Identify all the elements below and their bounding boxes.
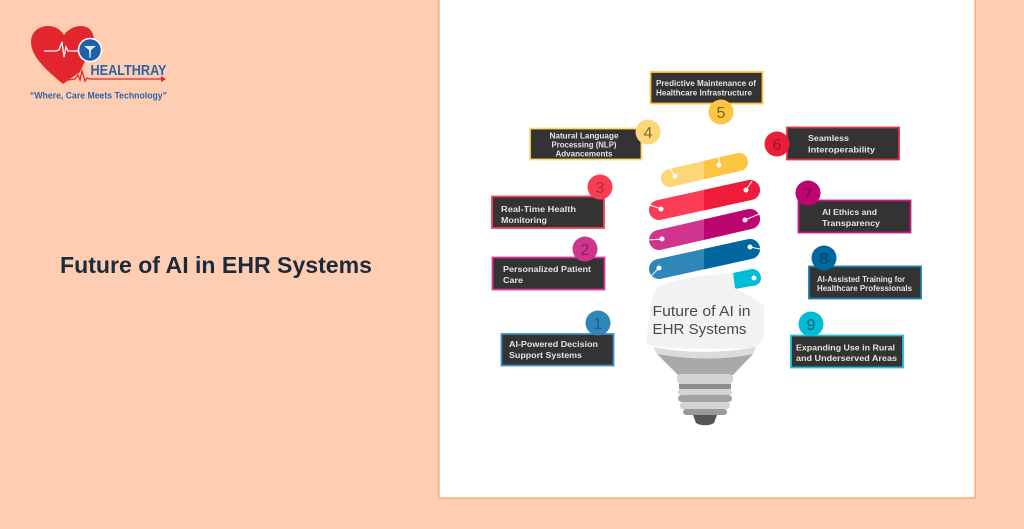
item 2 [492, 236, 604, 290]
coil: blue [651, 244, 760, 276]
item 1: AI-Powered Decision [509, 339, 598, 349]
screw threads [677, 374, 733, 415]
bulb label: EHR Systems [652, 322, 746, 338]
item 7: 7 [804, 186, 813, 203]
item 4: 4 [644, 125, 653, 142]
item 4: Processing (NLP) [552, 140, 617, 150]
item 8: AI-Assisted Training for [817, 275, 905, 284]
item 8 [809, 246, 921, 298]
bulb tip [693, 415, 717, 425]
item 6: 6 [773, 137, 782, 154]
bulb glass [646, 273, 764, 349]
item 5: Predictive Maintenance of [656, 78, 756, 88]
item 8: 8 [820, 251, 829, 268]
item 7: Transparency [822, 218, 880, 228]
item 3 [492, 174, 612, 228]
item 9: and Underserved Areas [796, 353, 897, 363]
panel: infographic card [439, 0, 975, 498]
title: Future of AI in EHR Systems [60, 252, 372, 278]
bulb label: Future of AI in [652, 304, 750, 320]
logo tagline: “Where, Care Meets Technology” [30, 90, 167, 100]
item 4 [530, 120, 660, 160]
item 5: 5 [717, 105, 726, 122]
item 6: Interoperability [808, 144, 875, 154]
item 9 [791, 312, 903, 368]
item 1: Support Systems [509, 350, 582, 360]
logo arrow [68, 71, 162, 81]
item 2: 2 [581, 242, 590, 259]
icon: caduceus badge [78, 38, 102, 62]
icon: pulse line [44, 42, 80, 57]
item 5 [650, 72, 762, 124]
item 5: Healthcare Infrastructure [656, 88, 752, 98]
bulb collar [653, 347, 756, 359]
light bulb illustration [646, 156, 764, 425]
bulb cone [657, 354, 753, 375]
item 3: Real-Time Health [501, 204, 576, 214]
item 9: Expanding Use in Rural [796, 342, 895, 352]
item 6 [764, 128, 899, 160]
logo: Healthray [30, 26, 167, 100]
coil: yellow [670, 156, 739, 178]
item 3: Monitoring [501, 215, 547, 225]
coil: cyan [733, 269, 761, 289]
coil: magenta [649, 214, 759, 242]
item 3: 3 [596, 180, 605, 197]
item 4: Advancements [556, 148, 613, 158]
item 4: Natural Language [550, 130, 619, 140]
coil: red [650, 181, 752, 212]
item 7 [796, 180, 910, 232]
item 2: Care [503, 275, 523, 285]
item 9: 9 [807, 317, 816, 334]
logo name: HEALTHRAY [90, 62, 166, 79]
item 6: Seamless [808, 133, 849, 143]
item 1: 1 [594, 316, 603, 333]
item 7: AI Ethics and [822, 207, 877, 217]
item 2: Personalized Patient [503, 264, 591, 274]
icon: heart [31, 26, 94, 84]
item 8: Healthcare Professionals [817, 284, 913, 293]
item 1 [502, 310, 614, 366]
bulb label [652, 304, 750, 338]
